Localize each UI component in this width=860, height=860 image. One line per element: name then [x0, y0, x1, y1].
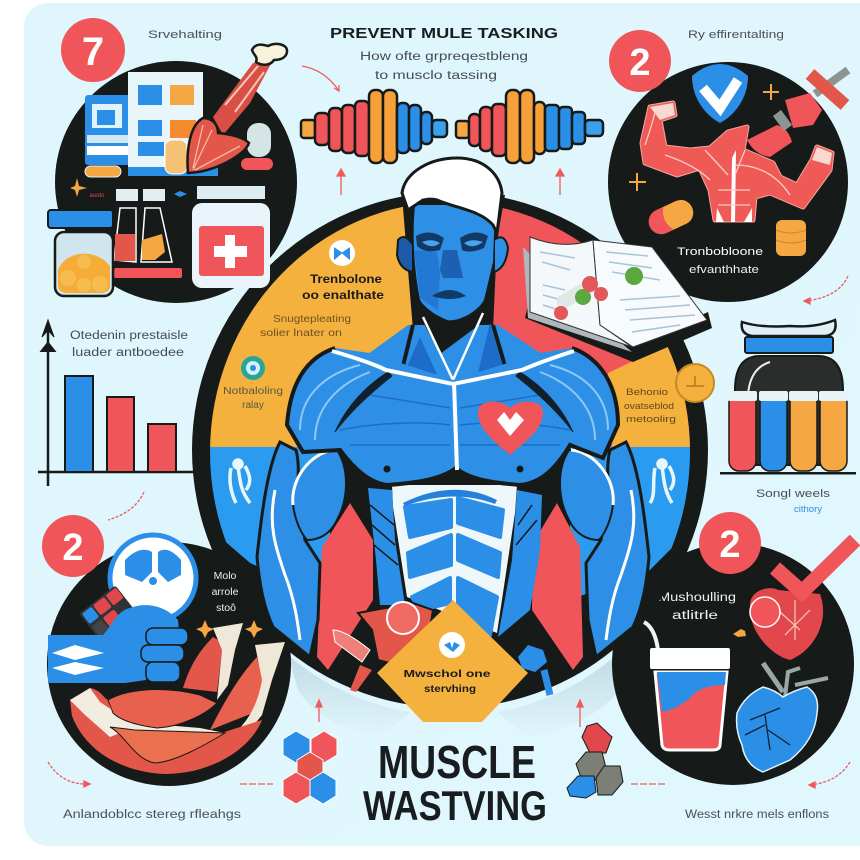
- blue lower left: [210, 447, 330, 568]
- dumbbell right: [456, 90, 603, 163]
- ears: [397, 237, 413, 272]
- red heart: [750, 588, 823, 660]
- red strip right: [532, 503, 583, 670]
- badge: 2 top right: 2: [629, 42, 651, 84]
- top labels: Ry effirentalting: [688, 29, 784, 41]
- left yellow caption: Notbaloling: [223, 386, 283, 397]
- two bottles: [114, 189, 182, 278]
- coin stack: [776, 220, 806, 256]
- blue hex bolt: [518, 645, 550, 695]
- panel: central circle: [192, 158, 714, 722]
- shadow under central circle: [288, 655, 620, 738]
- bar chart: [38, 320, 200, 486]
- heart emblem: [478, 402, 543, 455]
- hexagon cluster left: [283, 731, 337, 804]
- yellow diamond callout: Mwschol one: [404, 668, 491, 680]
- bottom-left circle caption: stoô: [216, 602, 236, 614]
- eyes: [416, 232, 488, 252]
- right arm: [560, 442, 649, 657]
- hair: [402, 158, 502, 233]
- left yellow caption: [223, 274, 384, 411]
- bottom labels: Anlandoblcc stereg rfleahgs: [63, 809, 241, 821]
- nipple marks: [384, 466, 524, 472]
- panel: top-left circle, supplements: [48, 44, 297, 303]
- small blue sparkle: [174, 191, 187, 197]
- panel: bottom-left circle, fist: [47, 535, 291, 786]
- title: prevent heading: PREVENT MULE TASKING: [330, 26, 558, 42]
- icon: left figures: [230, 460, 250, 503]
- document stack: [85, 72, 218, 177]
- badge: 7: [61, 18, 125, 82]
- icon: teal badge: [241, 356, 265, 380]
- sparkles: [629, 84, 779, 191]
- left yellow caption: solier lnater on: [260, 328, 342, 339]
- pill cluster: [79, 585, 136, 640]
- abs: [403, 490, 503, 635]
- jar caption: cithory: [794, 504, 822, 515]
- capsules right of documents: [165, 123, 273, 174]
- chest outer outline: [287, 348, 618, 485]
- red right sector: [493, 208, 690, 447]
- yellow diamond callout: stervhing: [424, 683, 476, 695]
- icon: right figures: [650, 460, 674, 503]
- panel: bottom-right circle, heart and drink: [612, 543, 854, 785]
- left yellow caption: ralay: [242, 400, 264, 411]
- hexagon cluster right: [567, 723, 623, 798]
- bar chart: luader antboedee: [72, 347, 184, 359]
- title: muscle wasting: MUSCLE: [378, 736, 536, 788]
- title: muscle wasting: WASTVING: [363, 782, 547, 829]
- badge: 2 top right: [609, 30, 671, 92]
- small gold arrow: [733, 629, 746, 637]
- red strip left: [317, 503, 373, 670]
- circle caption: Tronbobloone: [677, 246, 763, 258]
- drink cup: [644, 622, 730, 750]
- blue fist: [48, 605, 188, 683]
- bottom-left circle caption: [212, 570, 239, 614]
- vial jar panel: [720, 320, 856, 474]
- top labels: Srvehalting: [148, 29, 222, 41]
- white collar lines: [332, 351, 574, 384]
- muscle piece at bottom: [333, 602, 433, 692]
- bottom labels: Wesst nrkre mels enflons: [685, 809, 829, 821]
- black gaps between deltoid and pectoral: [335, 372, 573, 432]
- pill jar: [48, 210, 113, 296]
- tiny red label: auoto: [89, 193, 105, 199]
- title: muscle wasting: [363, 736, 547, 829]
- figure: blue muscular man: [257, 158, 649, 657]
- badge: 2 bottom right: [699, 512, 761, 574]
- panel: bottom-right circle, heart and drink: atlitrle: [672, 610, 718, 622]
- right yellow caption: ovatseblod: [624, 401, 674, 412]
- yellow left sector: [210, 206, 413, 447]
- blue lower right: [570, 447, 690, 596]
- pectoral and deltoid lines: [300, 365, 608, 445]
- head and neck backdrop: [393, 195, 512, 372]
- capsule: [645, 196, 697, 238]
- badge: 2 bottom left: [42, 515, 104, 577]
- badge: 7: 7: [82, 30, 104, 74]
- open book with molecules: [523, 237, 712, 362]
- arrows: [48, 66, 850, 788]
- bottom labels: [63, 809, 829, 821]
- red checkmark: [775, 540, 855, 592]
- flexing red torso: [642, 103, 832, 222]
- jar caption: [756, 488, 831, 515]
- facial shadows: [414, 250, 440, 310]
- title: prevent heading: [330, 26, 558, 82]
- panel: top-right circle, muscle figure: efvanthhate: [689, 264, 759, 276]
- right yellow caption: Behonio: [626, 387, 668, 398]
- shield check icon: [692, 64, 748, 123]
- small gold sparkle: [70, 178, 87, 197]
- jar caption: Songl weels: [756, 488, 831, 500]
- magnifier disc: [110, 535, 196, 621]
- yellow diamond callout: [377, 600, 528, 722]
- yellow right sector: [608, 347, 690, 447]
- left yellow caption: Snugtepleating: [273, 314, 351, 325]
- sparkles beside muscles: [196, 620, 263, 638]
- icon: gold coin: [676, 364, 714, 402]
- blue lung heart: [737, 663, 828, 772]
- circle caption: Mushoulling: [658, 592, 736, 604]
- neck: [412, 313, 492, 380]
- black lower mask: [226, 542, 672, 596]
- left yellow caption: oo enalthate: [302, 290, 384, 302]
- badge: 2 bottom right: 2: [719, 524, 741, 566]
- bone and muscle: [188, 44, 287, 173]
- face: [414, 205, 495, 320]
- left arm: [257, 442, 346, 657]
- torso base: [392, 485, 517, 633]
- lat muscles: [368, 488, 542, 637]
- dumbbell left: [301, 90, 447, 163]
- badge: 2 bottom left: 2: [62, 527, 84, 569]
- chest and shoulders: [287, 348, 618, 485]
- medicine jar with cross: [192, 186, 270, 288]
- right yellow caption: [624, 387, 676, 425]
- bottom-left circle caption: arrole: [212, 586, 239, 598]
- bottom-left circle caption: Molo: [214, 570, 237, 582]
- icon: blue dumbbell badge: [329, 240, 355, 266]
- bar chart: Otedenin prestaisle: [70, 330, 188, 342]
- panel: top-right circle, muscle figure: [608, 62, 848, 302]
- top labels: [148, 29, 784, 41]
- dumbbell on arm: [747, 70, 848, 157]
- vials: [729, 393, 847, 471]
- red muscles: [70, 623, 285, 774]
- title: prevent heading: to musclo tassing: [375, 70, 497, 82]
- left yellow caption: Trenbolone: [310, 274, 382, 286]
- upper trapezius: [368, 323, 542, 384]
- right yellow caption: metoolirg: [626, 414, 676, 425]
- title: prevent heading: How ofte grpreqestbleng: [360, 51, 528, 63]
